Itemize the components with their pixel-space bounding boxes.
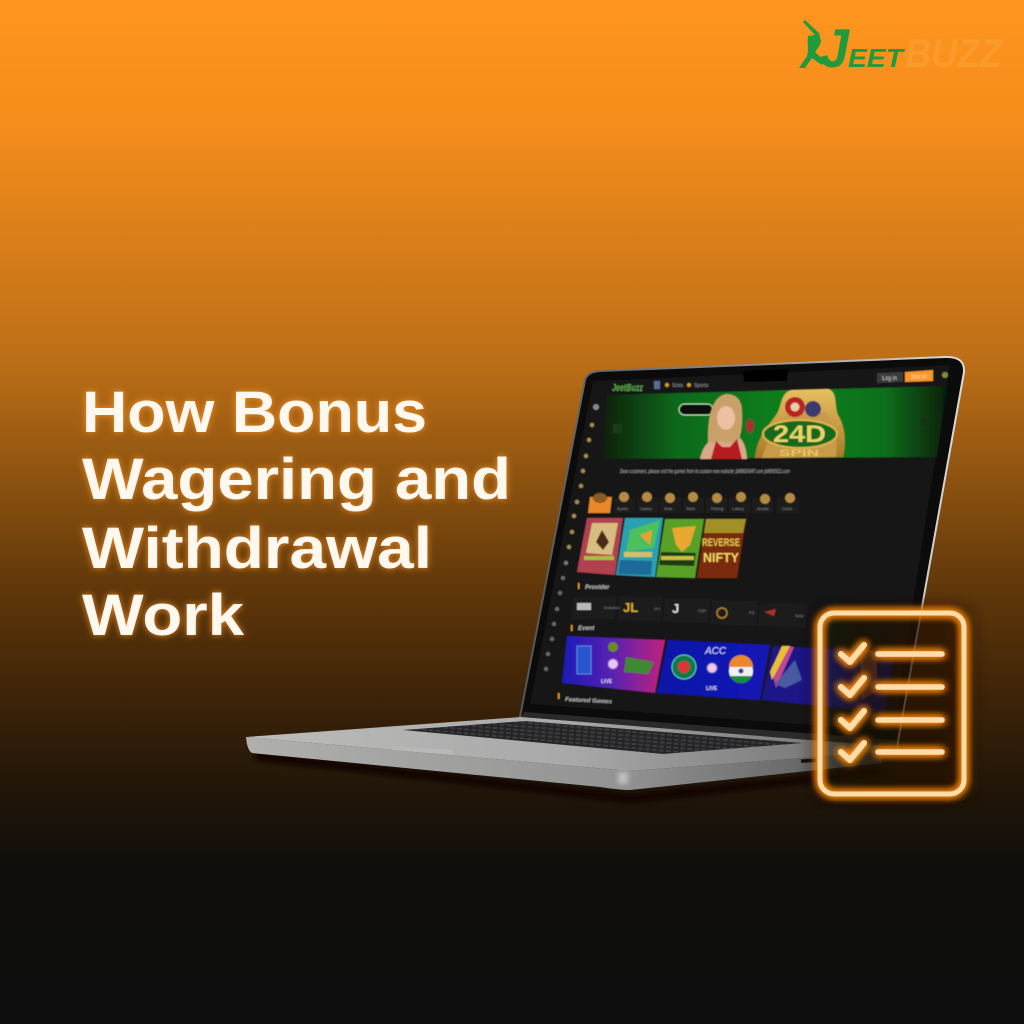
event card 1 <box>562 636 665 693</box>
tab icons <box>619 492 795 504</box>
featured games heading: Featured Games <box>565 697 613 705</box>
gold medallion <box>755 389 845 458</box>
tab labels: Sports <box>617 507 628 511</box>
logo wordmark: BUZZ <box>905 32 1003 76</box>
nav items <box>654 381 709 389</box>
provider tiles: Evolution <box>604 606 620 610</box>
keyboard <box>403 721 803 754</box>
top buttons <box>877 370 948 383</box>
card 2 <box>616 518 663 577</box>
banner script: SPIN <box>779 448 819 458</box>
base top deck <box>246 717 897 771</box>
card 4: NIFTY <box>703 550 739 565</box>
nav items: Sports <box>694 383 709 389</box>
featured games heading <box>558 693 613 705</box>
medallion panel <box>763 420 837 448</box>
screen <box>530 365 950 731</box>
top bar logo: JeetBuzz <box>612 383 643 394</box>
tab labels: Fishing <box>711 507 723 511</box>
title <box>82 380 511 648</box>
provider tiles <box>571 596 808 628</box>
provider tiles: PG <box>749 611 755 615</box>
tab labels: Casino <box>640 507 652 511</box>
card 1 <box>577 518 623 575</box>
top buttons: Log in <box>882 376 897 382</box>
event heading <box>571 625 595 632</box>
provider tiles: JILI <box>654 607 660 611</box>
provider tiles: Sexy <box>795 614 804 618</box>
banner <box>602 386 947 459</box>
banner badge <box>679 404 713 415</box>
check marks <box>841 645 864 760</box>
card 4 <box>697 519 746 578</box>
active tab <box>588 497 612 513</box>
tab labels: Crash <box>782 507 792 511</box>
title: Wagering and <box>82 447 511 512</box>
title: Work <box>82 583 245 648</box>
tab labels <box>617 507 792 511</box>
logo wordmark: J <box>820 19 850 80</box>
woman <box>700 394 754 459</box>
provider heading <box>578 583 610 591</box>
category tabs <box>588 492 799 513</box>
event card 2: LIVE <box>706 686 718 692</box>
tab labels: Table <box>686 507 695 511</box>
list lines <box>878 654 942 752</box>
sidebar icons <box>544 404 599 671</box>
tab labels: Arcade <box>757 507 769 511</box>
side port <box>801 759 816 763</box>
logo wordmark: EET <box>848 43 905 73</box>
flag: Bangladesh <box>672 655 696 679</box>
title: Withdrawal <box>82 516 432 581</box>
provider tiles: J <box>672 601 679 616</box>
event card 2 <box>657 640 770 700</box>
document outline <box>820 613 964 794</box>
checklist backdrop <box>808 606 973 801</box>
event heading: Event <box>578 626 595 632</box>
laptop shadow <box>255 752 880 802</box>
top buttons: SIGN UP <box>911 375 927 381</box>
checklist icon <box>808 606 973 801</box>
provider heading: Provider <box>585 585 610 591</box>
flag: India <box>729 655 753 683</box>
logo: JeetBuzz <box>799 19 1003 80</box>
laptop base <box>246 712 897 790</box>
tab labels: Lottery <box>732 507 744 511</box>
checklist neon graphic <box>820 613 964 794</box>
provider tiles: JL <box>623 600 638 615</box>
chips <box>785 397 805 417</box>
front corner highlight <box>618 772 628 784</box>
inactive tabs <box>614 498 799 513</box>
nav items: Slots <box>672 383 684 389</box>
24D text: 24D <box>773 421 826 448</box>
game cards <box>577 518 746 578</box>
provider tiles: CQ9 <box>698 609 706 613</box>
laptop lid <box>520 357 964 747</box>
base front edge <box>246 737 882 790</box>
notice line: Dear customers, please visit the games from its custom new website: jb88829347.com jb8892921.com <box>620 469 790 475</box>
title: How Bonus <box>82 380 427 445</box>
banner arrows <box>613 424 622 433</box>
icon: cricket batter <box>799 20 826 68</box>
hinge shadow <box>521 712 897 747</box>
event card 1: LIVE <box>601 679 613 685</box>
laptop <box>246 357 964 802</box>
logo wordmark <box>820 19 1003 80</box>
event card 3 <box>762 646 895 712</box>
trackpad notch <box>392 746 453 755</box>
notch <box>743 369 788 382</box>
card 3 <box>656 519 704 578</box>
ACC label: ACC <box>704 646 727 657</box>
tab labels: Slots <box>664 507 673 511</box>
card 4: REVERSE <box>702 537 740 549</box>
